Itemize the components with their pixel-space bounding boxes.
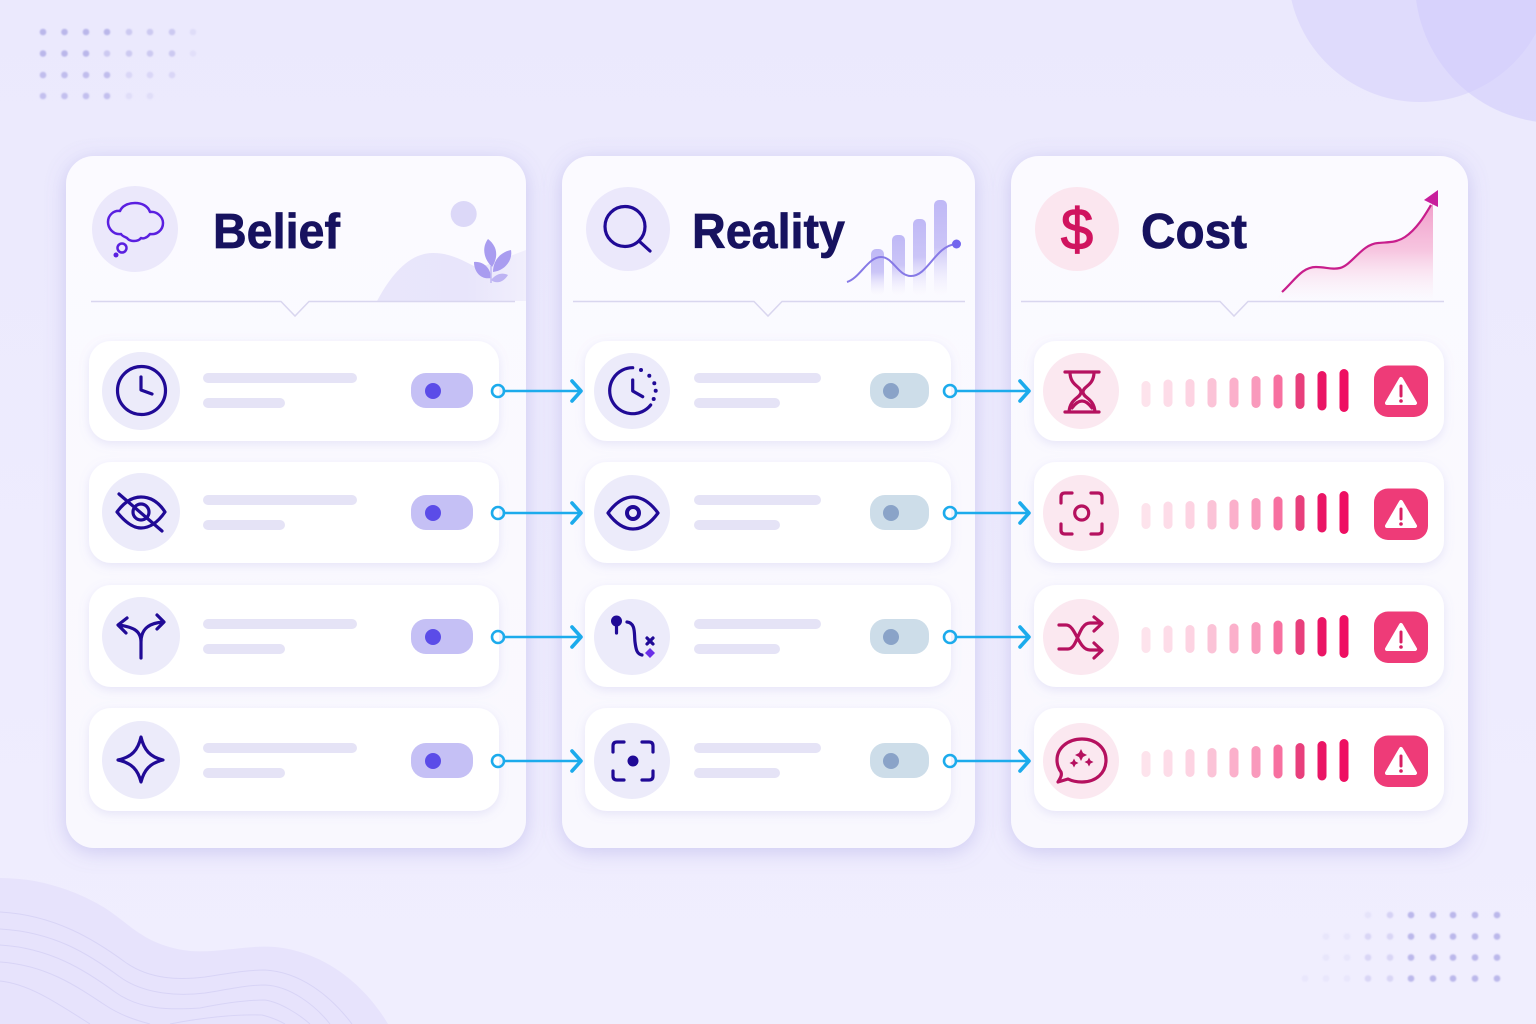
- icon: dashed clock: [594, 353, 670, 429]
- row: Cost 2: [1034, 462, 1444, 563]
- arrow: Reality to Cost row 2: [944, 503, 1029, 523]
- toggle: [870, 743, 929, 778]
- icon: shuffle arrows: [1043, 599, 1119, 675]
- row: Reality 1: [585, 341, 951, 441]
- panel: Cost: [1011, 156, 1468, 848]
- severity meter: [1142, 615, 1348, 658]
- icon: magnifier: [586, 187, 670, 271]
- icon: warning badge: [1374, 366, 1428, 417]
- icon: sparkle star: [102, 721, 180, 799]
- arrow: Reality to Cost row 1: [944, 381, 1029, 401]
- text placeholder: [203, 495, 357, 530]
- text placeholder: [203, 619, 357, 654]
- icon: dollar sign: $: [1061, 197, 1093, 262]
- icon: dollar sign: [1035, 187, 1119, 271]
- arrow: Reality to Cost row 4: [944, 751, 1029, 771]
- text placeholder: [694, 743, 821, 778]
- icon: hourglass: [1043, 353, 1119, 429]
- icon: forked arrows: [102, 597, 180, 675]
- heading: Cost: Cost: [1141, 205, 1247, 259]
- icon: scan frame: [1043, 475, 1119, 551]
- icon: clock: [102, 352, 180, 430]
- toggle: [870, 619, 929, 654]
- illustration: hill, moon and plant: [377, 201, 526, 301]
- row: Reality 2: [585, 462, 951, 563]
- divider with notch: [1021, 302, 1444, 316]
- text placeholder: [694, 373, 821, 408]
- icon: warning badge: [1374, 736, 1428, 787]
- icon: warning badge: [1374, 488, 1428, 540]
- icon: eye: [594, 475, 670, 551]
- heading: Reality: Reality: [692, 205, 845, 259]
- panel: Reality: [562, 156, 975, 848]
- severity meter: [1142, 491, 1348, 534]
- toggle: [411, 743, 473, 778]
- icon: focus frame: [594, 723, 670, 799]
- icon: eye crossed out: [102, 473, 180, 551]
- row: Belief 1: [89, 341, 499, 441]
- toggle: [411, 373, 473, 408]
- row: Cost 3: [1034, 585, 1444, 687]
- divider with notch: [573, 302, 965, 316]
- row: Reality 4: [585, 708, 951, 811]
- row: Cost 4: [1034, 708, 1444, 811]
- decoration: top right circles: [1288, 0, 1536, 123]
- row: Cost 1: [1034, 341, 1444, 441]
- row: Belief 3: [89, 585, 499, 687]
- row: Belief 4: [89, 708, 499, 811]
- text placeholder: [203, 373, 357, 408]
- text placeholder: [694, 495, 821, 530]
- arrow: Reality to Cost row 3: [944, 627, 1029, 647]
- panel: Belief: [66, 156, 526, 848]
- decoration: bottom right dot grid: [1302, 912, 1500, 982]
- text placeholder: [694, 619, 821, 654]
- chart: rising cost curve: [1277, 190, 1438, 299]
- arrow: Belief to Reality row 3: [492, 627, 581, 647]
- decoration: bottom left wave: [0, 878, 388, 1024]
- icon: chat bubble with sparkles: [1043, 723, 1119, 799]
- toggle: [870, 373, 929, 408]
- severity meter: [1142, 739, 1348, 782]
- text placeholder: [203, 743, 357, 778]
- icon: winding route: [594, 599, 670, 675]
- divider with notch: [91, 302, 515, 316]
- toggle: [870, 495, 929, 530]
- toggle: [411, 619, 473, 654]
- arrow: Belief to Reality row 4: [492, 751, 581, 771]
- arrow: Belief to Reality row 2: [492, 503, 581, 523]
- chart: bars and trend line: [847, 200, 961, 295]
- row: Belief 2: [89, 462, 499, 563]
- decoration: top left dot grid: [40, 29, 196, 99]
- heading: Belief: Belief: [213, 205, 341, 259]
- arrow: Belief to Reality row 1: [492, 381, 581, 401]
- severity meter: [1142, 369, 1348, 412]
- icon: warning badge: [1374, 612, 1428, 663]
- toggle: [411, 495, 473, 530]
- icon: thought cloud: [92, 186, 178, 272]
- row: Reality 3: [585, 585, 951, 687]
